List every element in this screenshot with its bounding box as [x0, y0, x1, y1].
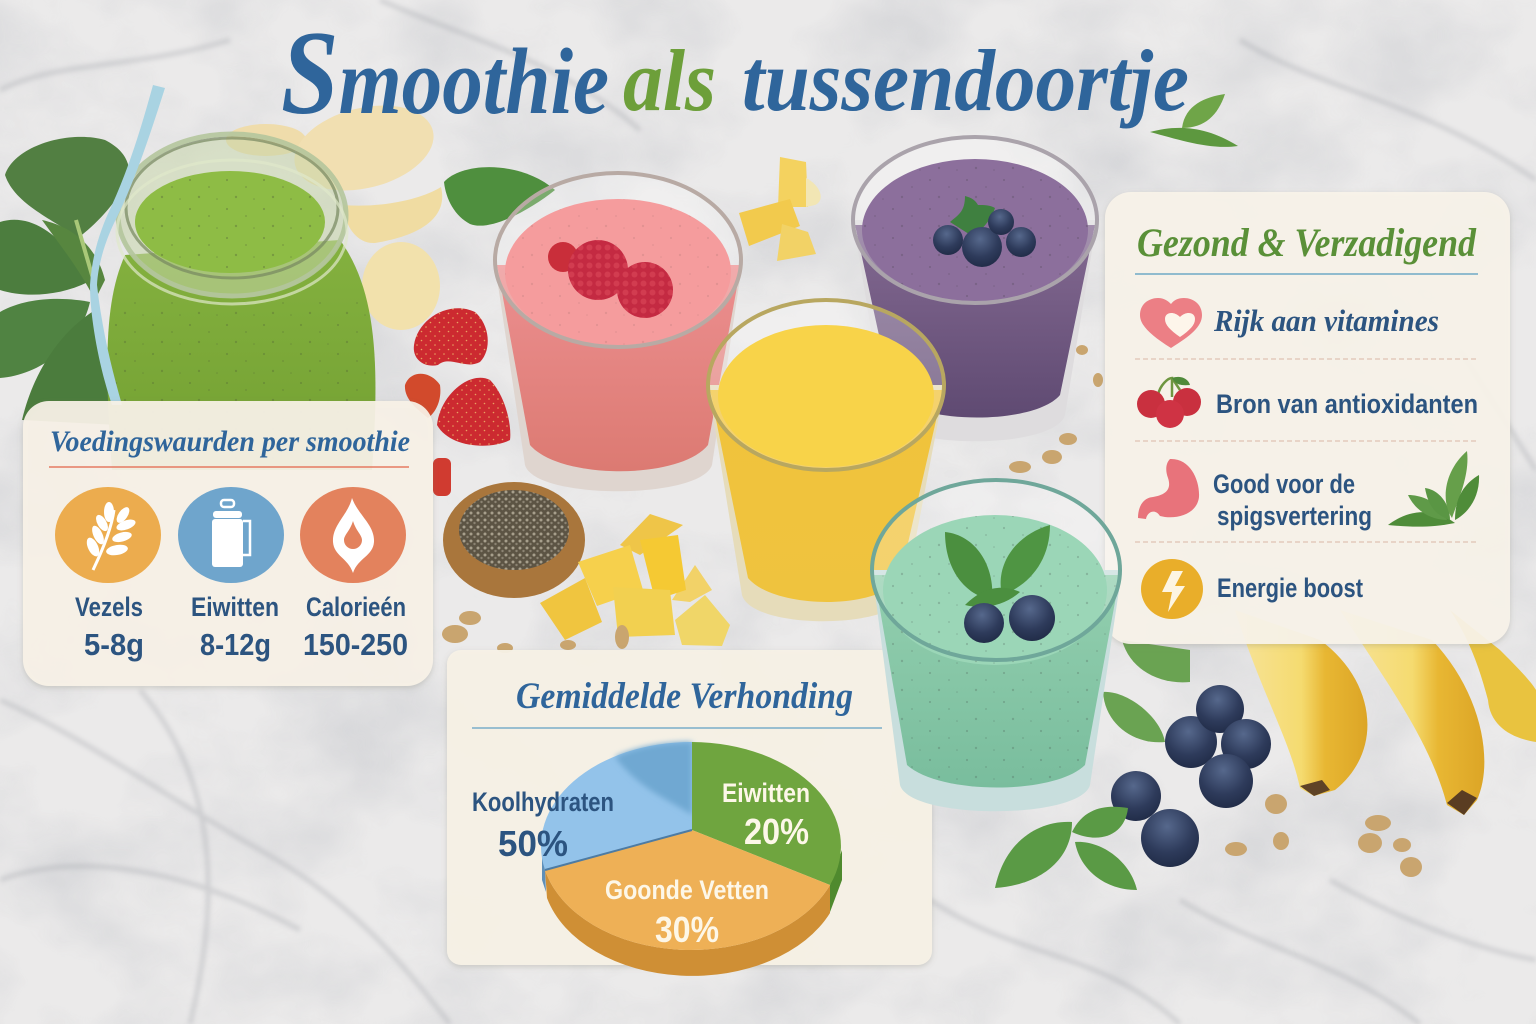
icon: seeds and nuts	[442, 345, 1422, 877]
chia bowl	[443, 482, 585, 598]
icon: basil leaf	[444, 167, 555, 226]
pink smoothie glass	[495, 173, 742, 491]
text: energie boost: Energie boost	[1217, 573, 1363, 603]
heading: Gemiddelde Verhonding	[516, 676, 853, 717]
title	[281, 6, 1238, 147]
label: eiwitten	[191, 592, 279, 662]
icon: scattered blueberries	[1111, 685, 1271, 867]
label: calorieen: 150-250	[303, 627, 408, 662]
icon: bananas	[1235, 610, 1536, 815]
label: vezels: Vezels	[75, 592, 143, 622]
label: vezels: 5-8g	[84, 627, 144, 662]
panel: gemiddelde verhouding	[447, 650, 932, 976]
panel: gezond en verzadigend	[1105, 192, 1510, 644]
label: calorieen: Calorieén	[306, 592, 406, 622]
label: eiwitten: 8-12g	[200, 627, 271, 662]
label: koolhydraten: 50%	[498, 823, 568, 864]
icon: blueberries with mint	[933, 196, 1036, 267]
pie chart	[472, 742, 842, 976]
label: eiwitten: Eiwitten	[191, 592, 279, 622]
icon: banana slices	[226, 92, 443, 330]
green smoothie jar	[90, 85, 375, 470]
icon: spinach leaves	[0, 137, 129, 425]
mint smoothie glass	[872, 480, 1122, 811]
icon: leaf sprig	[1388, 451, 1479, 527]
icon: mango cubes	[540, 514, 730, 646]
icon: title leaves	[1150, 94, 1238, 147]
text: spijsvertering: Good voor de	[1213, 469, 1355, 499]
text: spijsvertering: spigsvertering	[1217, 501, 1372, 531]
icon: strawberries	[405, 308, 510, 496]
icon: shaker bottle	[178, 487, 284, 583]
label: eiwitten	[722, 778, 810, 852]
yellow smoothie glass	[708, 300, 945, 621]
heading: Voedingswaurden per smoothie	[50, 425, 410, 458]
label: goede vetten	[605, 875, 769, 950]
label: goede vetten: 30%	[655, 909, 719, 950]
label: vezels	[75, 592, 144, 662]
title: Smoothie	[281, 6, 609, 139]
panel: voedingswaarden	[23, 401, 433, 686]
icon: cherries	[1137, 377, 1201, 428]
label: eiwitten: Eiwitten	[722, 778, 810, 808]
icon: raspberries	[548, 240, 673, 318]
icon: mint and blueberries	[945, 525, 1055, 643]
label: eiwitten: 20%	[744, 811, 809, 852]
icon: wheat	[55, 487, 161, 583]
icon: mint leaves	[995, 640, 1190, 890]
label: koolhydraten: Koolhydraten	[472, 787, 614, 817]
label: goede vetten: Goonde Vetten	[605, 875, 769, 905]
icon: energy bolt	[1141, 559, 1203, 619]
purple smoothie glass	[853, 137, 1097, 441]
title: tussendoortje	[742, 33, 1189, 130]
icon: mango cubes top	[739, 157, 821, 261]
text: spijsvertering	[1213, 469, 1372, 531]
text: antioxidanten: Bron van antioxidanten	[1216, 389, 1478, 419]
title: als	[623, 33, 716, 130]
text: vitamines: Rijk aan vitamines	[1213, 303, 1439, 338]
label: koolhydraten	[472, 787, 614, 864]
icon: flame drop	[300, 487, 406, 583]
icon: heart	[1140, 298, 1202, 348]
label: calorieen	[303, 592, 408, 662]
icon: stomach	[1138, 459, 1199, 519]
heading: Gezond & Verzadigend	[1137, 220, 1477, 265]
